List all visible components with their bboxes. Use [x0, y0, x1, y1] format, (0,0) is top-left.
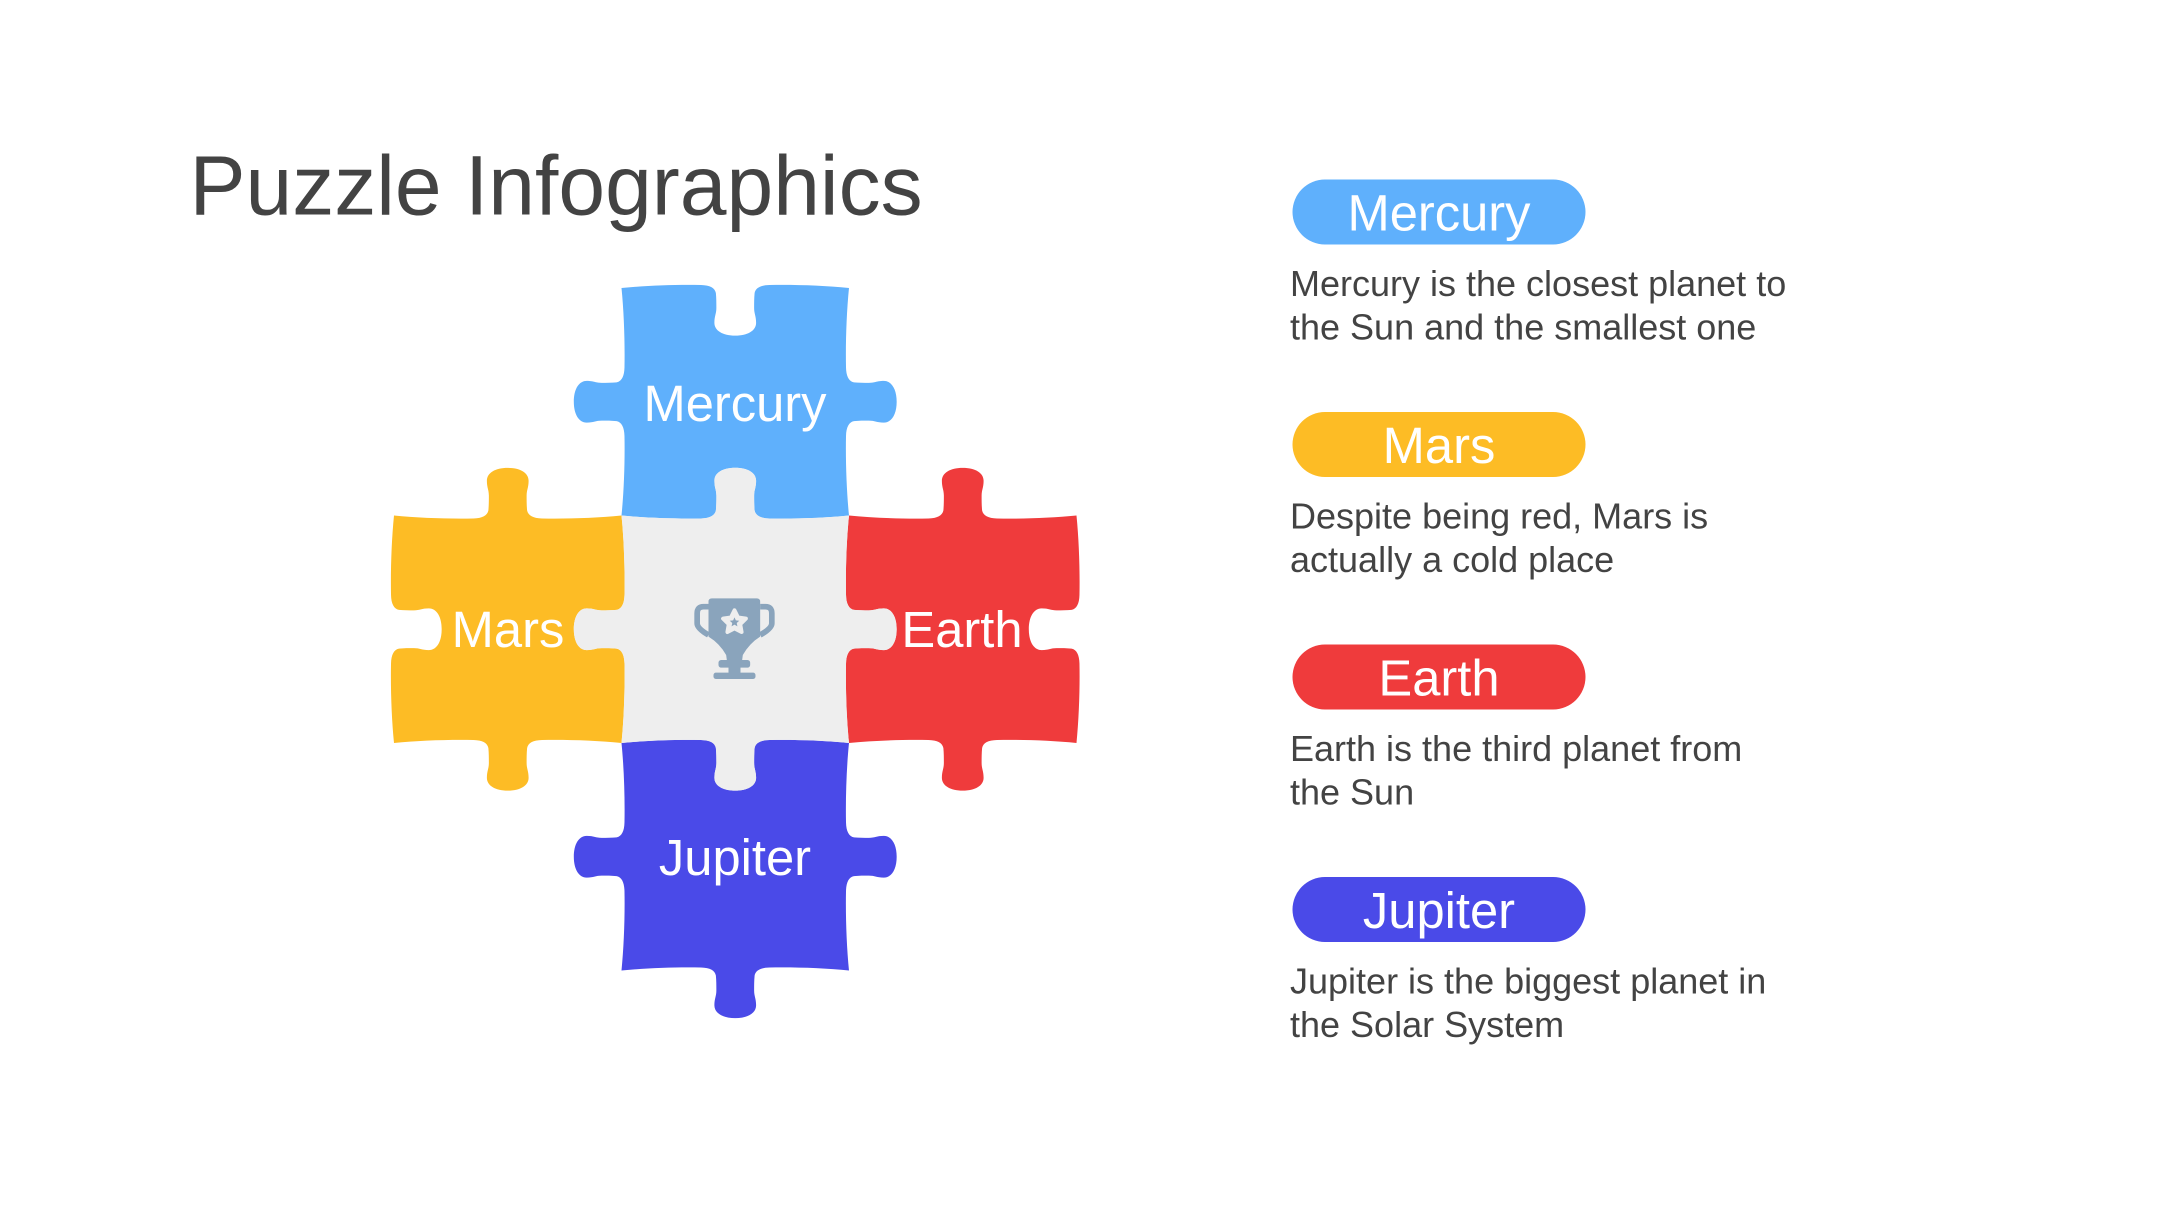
puzzle piece: Jupiter [574, 740, 897, 1018]
pill: Earth [1292, 644, 1586, 710]
text: Jupiter description: the Solar System [1290, 1004, 1564, 1045]
panel: Mars description [1290, 412, 1708, 580]
puzzle piece: Jupiter: Jupiter [659, 829, 811, 886]
pill: Earth: Earth [1378, 650, 1500, 706]
text: Jupiter description: Jupiter is the biggest planet in [1290, 960, 1766, 1002]
text: Earth description: Earth is the third planet from [1290, 728, 1742, 769]
puzzle piece: Earth: Earth [901, 601, 1023, 658]
text: Mars description: actually a cold place [1290, 539, 1614, 580]
panel: Jupiter description [1290, 877, 1766, 1045]
text: Earth description: the Sun [1290, 772, 1414, 812]
puzzle piece: Earth [846, 468, 1080, 791]
text: Mercury description: the Sun and the smallest one [1290, 306, 1756, 348]
title: Puzzle Infographics [190, 138, 923, 232]
icon: trophy [697, 598, 772, 679]
puzzle piece: Mars [391, 468, 625, 791]
pill: Mercury: Mercury [1347, 184, 1531, 242]
pill: Jupiter [1292, 877, 1586, 942]
pill: Mars [1292, 412, 1586, 477]
pill: Mercury [1292, 180, 1586, 244]
puzzle piece: Mercury: Mercury [643, 375, 827, 432]
pill: Mars: Mars [1383, 417, 1495, 474]
text: Mars description: Despite being red, Mars is [1290, 496, 1708, 536]
pill: Jupiter: Jupiter [1363, 882, 1515, 939]
panel: Earth description [1290, 644, 1742, 812]
puzzle diagram [391, 285, 1080, 1018]
text: Mercury description: Mercury is the closest planet to [1290, 263, 1786, 304]
puzzle piece: center [574, 468, 897, 791]
panel: Mercury description [1290, 180, 1786, 348]
puzzle piece: Mars: Mars [452, 601, 564, 658]
puzzle piece: Mercury [574, 285, 897, 519]
